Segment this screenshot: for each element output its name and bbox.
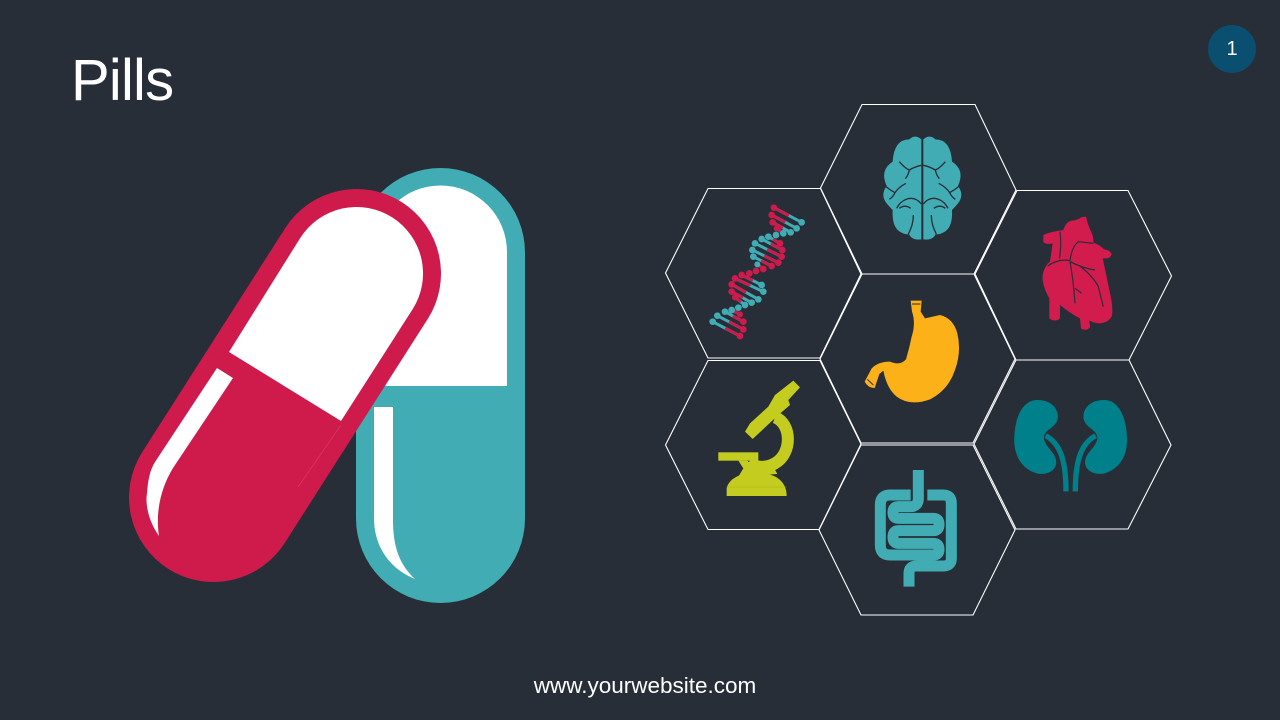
icon: red capsule (146, 207, 423, 536)
icon: heart (1043, 217, 1112, 330)
footer website: www.yourwebsite.com (534, 673, 756, 698)
panel: hexagon grid (666, 104, 1172, 615)
icon: DNA helix (709, 204, 805, 339)
title: Pills (71, 48, 173, 113)
icon: teal capsule (356, 168, 525, 603)
icon: brain (883, 137, 961, 240)
icon: intestine (880, 470, 951, 587)
icon: kidneys (1014, 400, 1127, 491)
page number badge (1208, 25, 1256, 73)
icon: microscope (718, 381, 800, 496)
icon: stomach (865, 301, 959, 402)
page number badge: 1 (1226, 38, 1238, 60)
